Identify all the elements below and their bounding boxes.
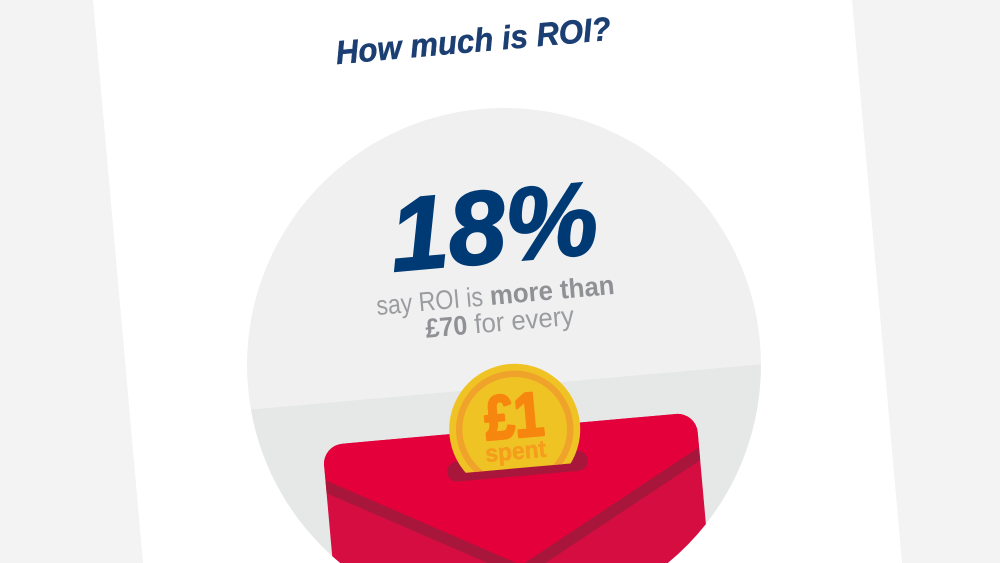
caption text: for every xyxy=(473,301,576,339)
coin value: £1 xyxy=(482,380,547,454)
coin label: spent xyxy=(484,436,547,468)
envelope body xyxy=(324,414,706,563)
envelope flap fold xyxy=(326,447,700,563)
statistic: 18%: 18% xyxy=(385,160,603,294)
caption text: more than xyxy=(489,270,616,311)
icon: coin xyxy=(449,364,580,473)
icon: red envelope xyxy=(324,414,706,563)
panel: circle illustration xyxy=(247,108,761,563)
coin slot xyxy=(446,450,589,482)
title: How much is ROI? xyxy=(334,10,612,71)
circle background xyxy=(247,108,761,563)
circle lower band xyxy=(251,364,761,563)
envelope flap xyxy=(324,414,699,563)
caption text xyxy=(375,270,618,348)
caption text: £70 xyxy=(424,310,469,344)
coin face xyxy=(449,364,580,473)
coin ring xyxy=(456,370,574,472)
caption text: say ROI is xyxy=(375,282,484,321)
